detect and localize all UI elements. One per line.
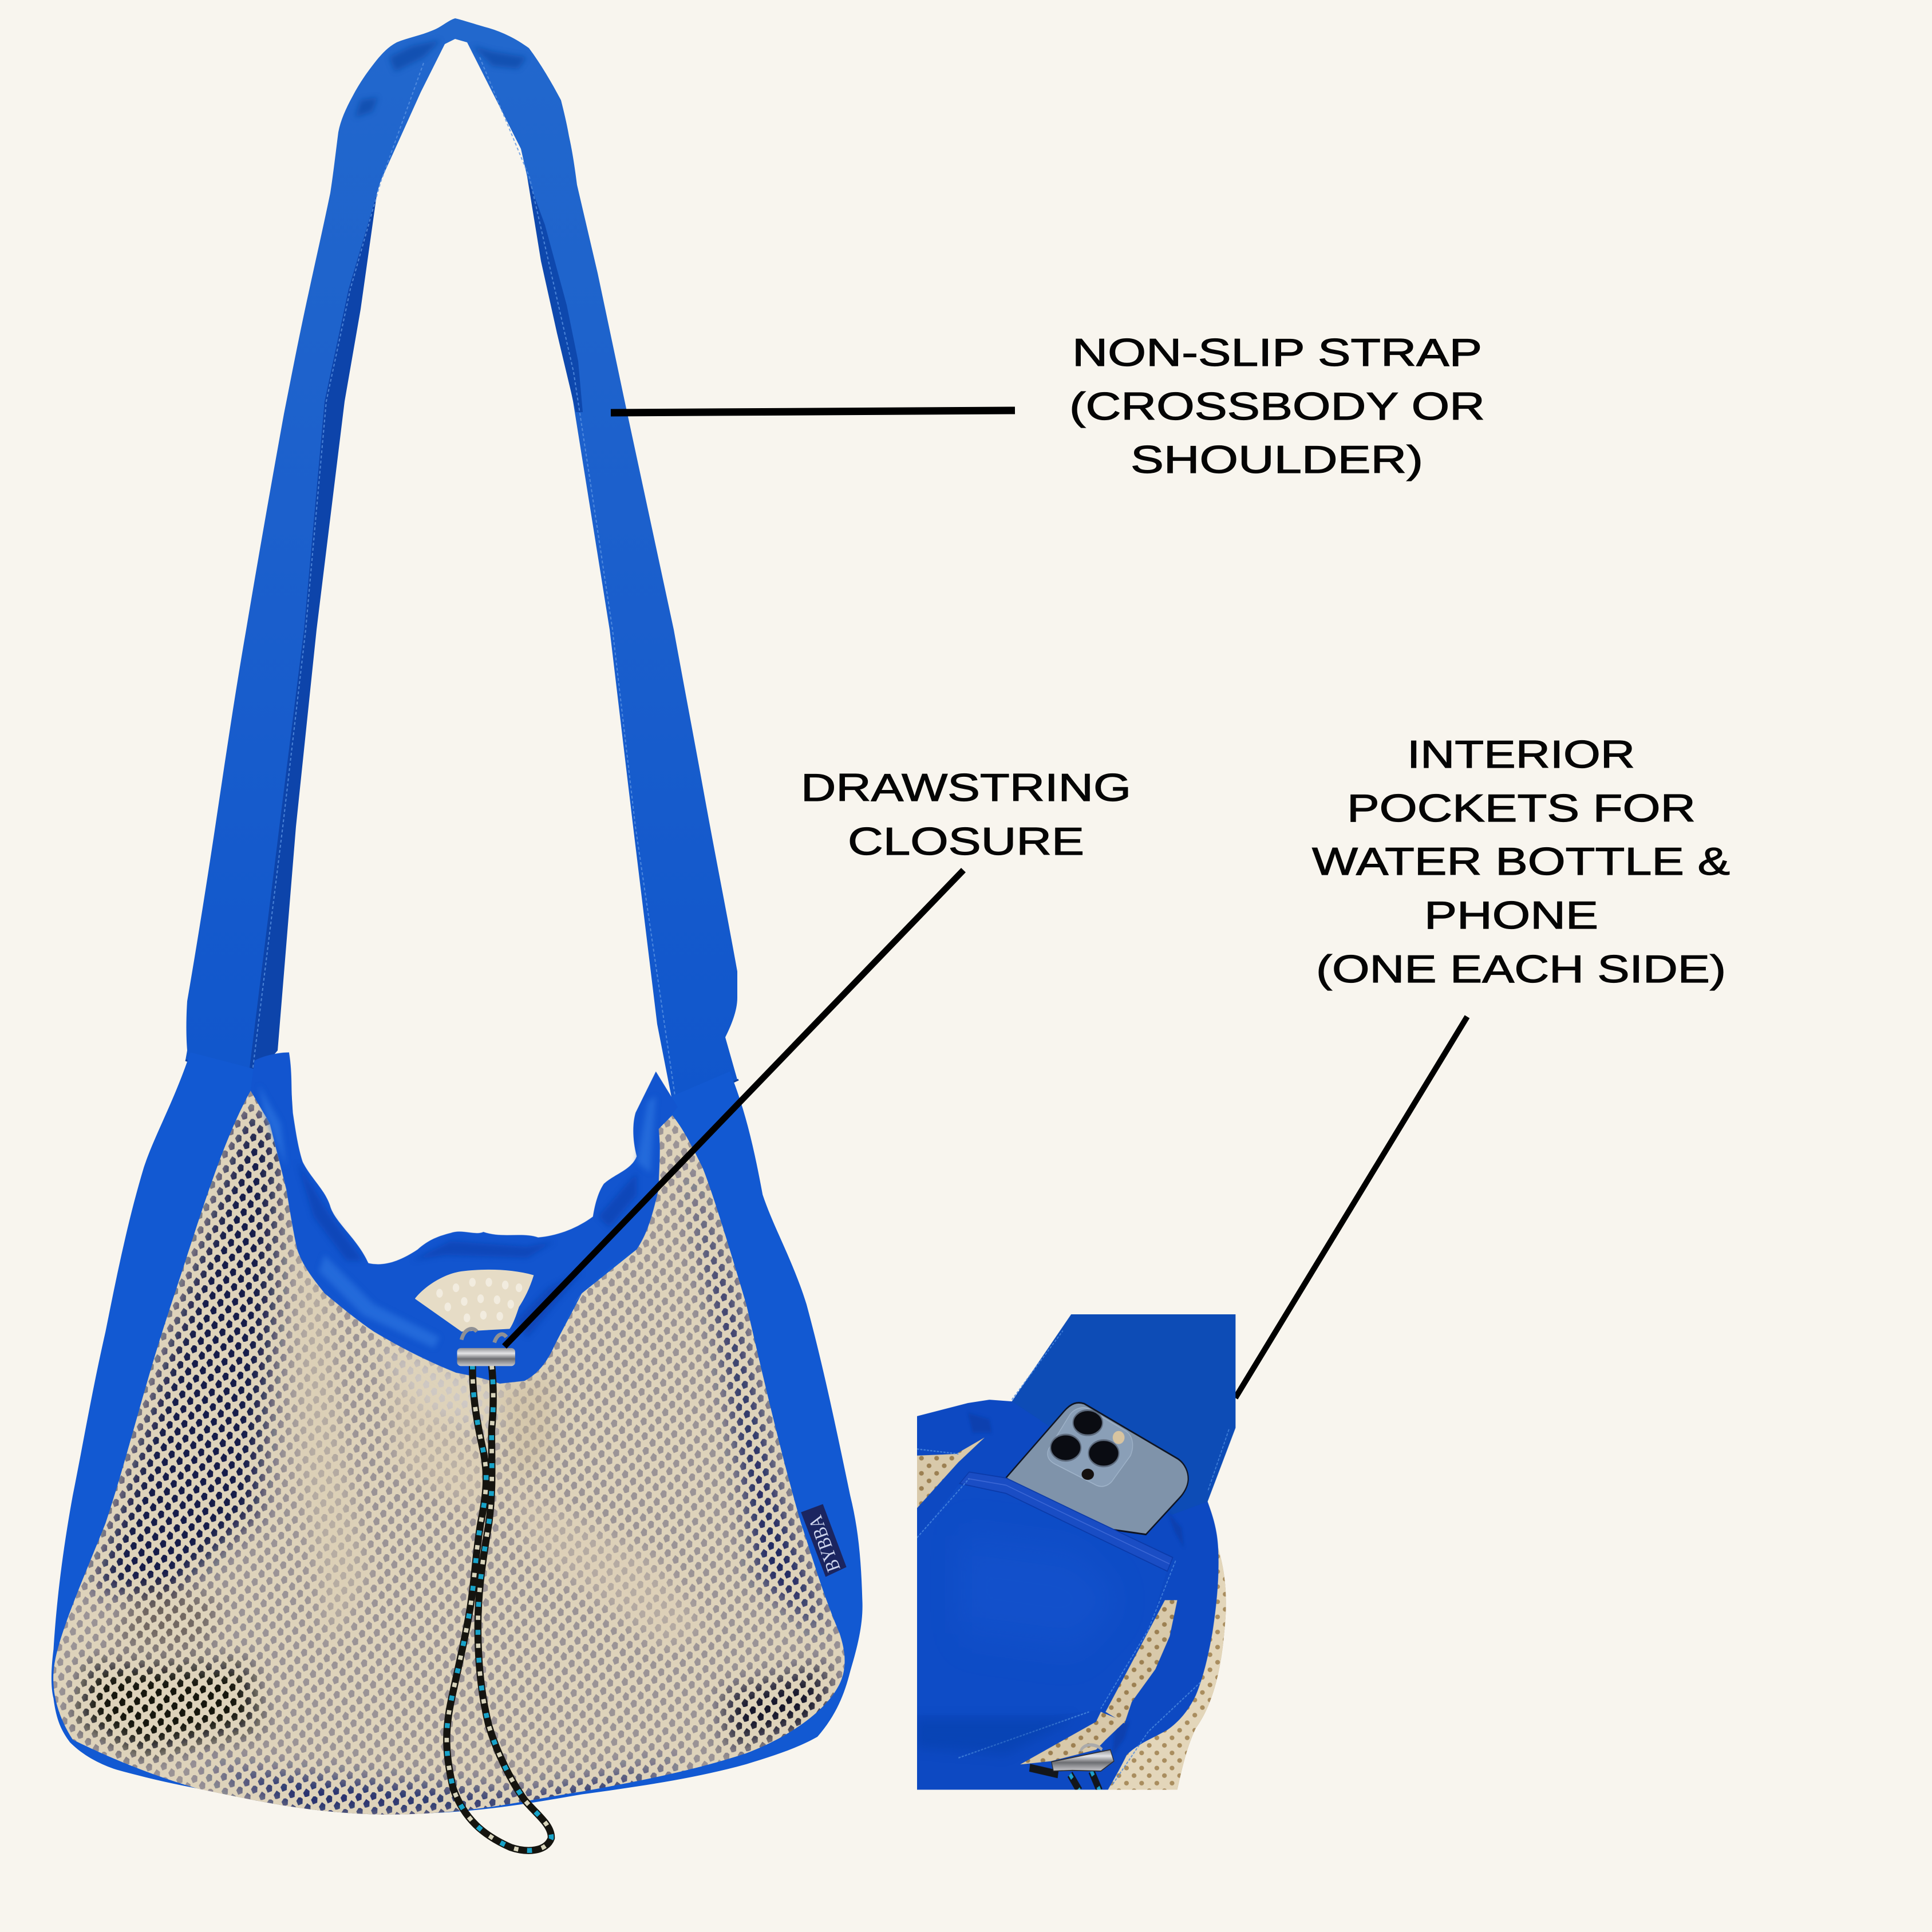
pocket elastic ribs [968,1479,1170,1564]
strap stitching [252,57,675,1099]
phone [1006,1402,1188,1534]
callout line: drawstring [504,870,963,1346]
mesh fold shading [297,1206,708,1649]
strap top shadow folds [355,40,527,117]
label: interior pockets: WATER BOTTLE & [1312,840,1730,883]
inset band gathers [968,1413,1184,1755]
inset inner mesh patches [911,1436,1243,1797]
inset outer mesh [911,1436,1243,1797]
phone lenses [1050,1411,1119,1467]
mesh hole underlay [53,1091,845,1815]
inset toggle and cords [1030,1745,1114,1791]
cord toggle [457,1329,515,1366]
label: interior pockets: POCKETS FOR [1347,787,1696,830]
strap base seams [185,1060,738,1109]
blue side panels [52,1052,863,1814]
inset photo: interior pocket with phone [911,1314,1243,1797]
drawstring gathered band [251,1052,678,1384]
drawstring cord [447,1365,551,1851]
gathered back rim left [256,1052,293,1124]
inset bag interior [917,1400,1219,1789]
callout line: interior pocket [1235,1017,1467,1398]
label: interior pockets: INTERIOR [1407,733,1635,776]
label: non-slip strap [1069,331,1485,481]
callout line: strap [611,410,1015,413]
label: non-slip strap: (CROSSBODY OR [1069,385,1485,428]
label: interior pockets: PHONE [1424,894,1598,937]
label: non-slip strap: SHOULDER) [1131,438,1423,481]
phone camera block [1048,1408,1133,1487]
phone flash and mic [1081,1431,1124,1480]
pocket shading [917,1534,1124,1755]
band folds [297,1162,637,1337]
pocket seams and gathers [917,1331,1229,1784]
pocket elastic hem [959,1472,1173,1571]
pocket front [917,1472,1172,1715]
shoulder strap [185,18,738,1109]
back mesh visible through opening [415,1270,534,1332]
label: interior pockets: (ONE EACH SIDE) [1316,947,1726,991]
label: drawstring closure: DRAWSTRING [801,766,1131,809]
label: drawstring closure [801,766,1131,863]
label: drawstring closure: CLOSURE [848,820,1084,863]
band highlights [259,1085,656,1348]
strap back fold right [527,177,583,412]
bag lower body [34,1052,867,1851]
inset strap [1012,1314,1235,1538]
brand tag: BYBBA [804,1512,845,1575]
main product: mesh sling bag [34,18,867,1851]
label: interior pockets [1312,733,1730,991]
label: non-slip strap: NON-SLIP STRAP [1072,331,1482,374]
mesh fabric [53,1095,845,1815]
strap back fold left [247,183,378,1086]
